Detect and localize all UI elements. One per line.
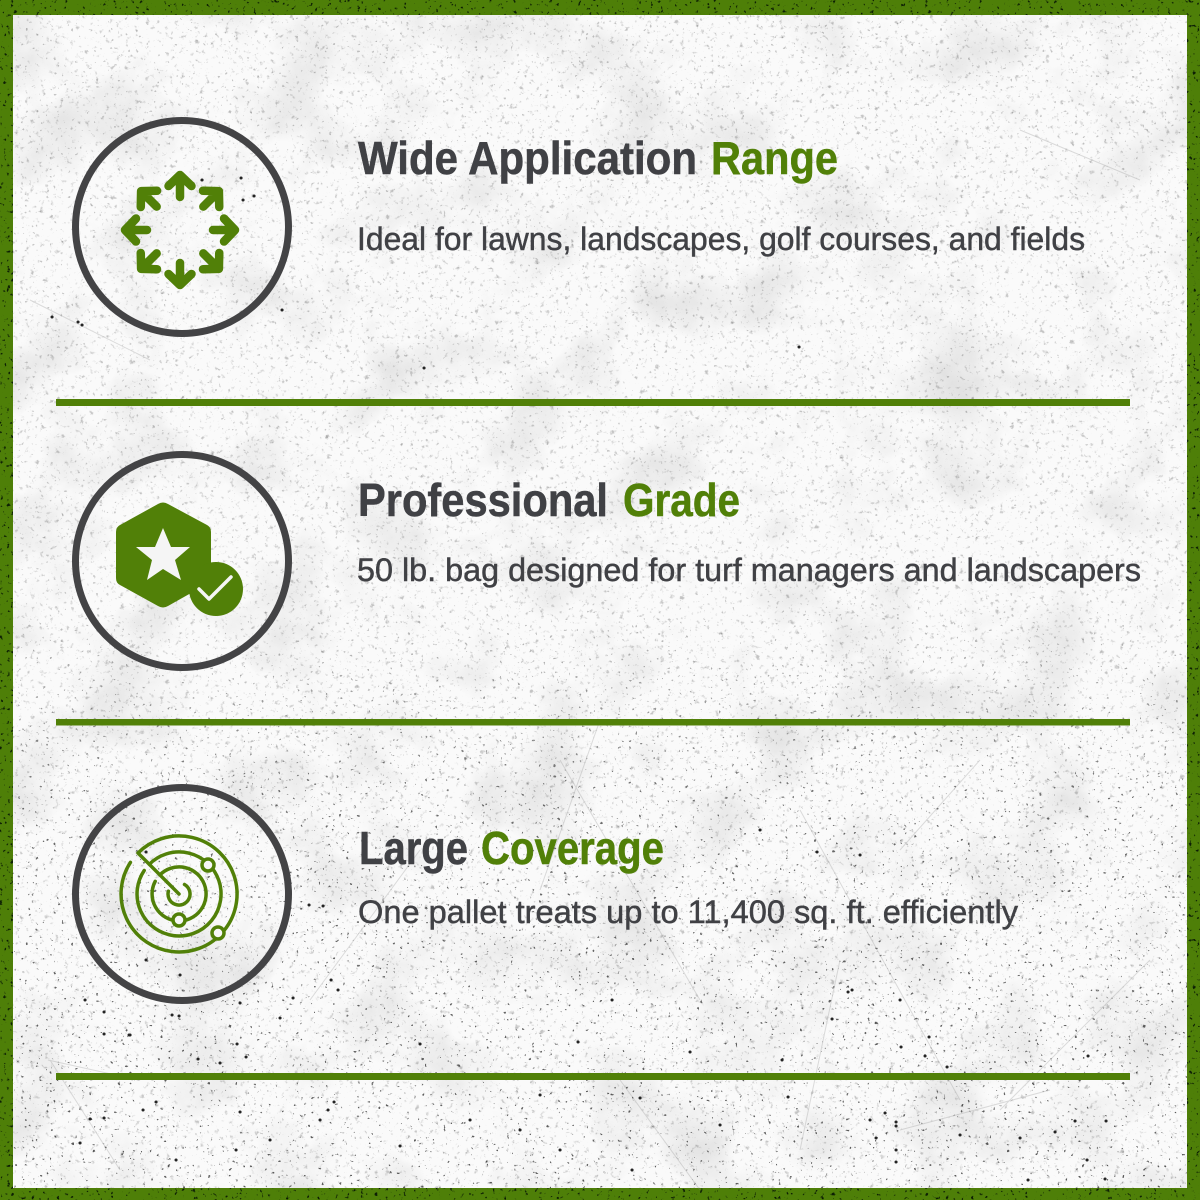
heading: wide application range: Wide Application (358, 132, 697, 184)
heading: wide application range: Range (711, 132, 838, 184)
heading: professional grade: Professional (358, 474, 608, 526)
text: bag description: 50 lb. bag designed for turf managers and landscapers (357, 552, 1141, 588)
section: large coverage (76, 788, 1018, 1000)
icon: expanding arrows in circle (76, 120, 288, 334)
icon: hexagon star badge in circle (76, 454, 288, 668)
section: professional grade (76, 454, 1141, 668)
divider 3 (56, 1073, 1130, 1080)
icon: radar in circle (76, 788, 288, 1000)
divider 2 (56, 719, 1130, 726)
divider 1 (56, 399, 1130, 406)
section: wide application range (76, 120, 1085, 334)
heading: professional grade: Grade (623, 474, 740, 526)
heading: large coverage (359, 822, 664, 874)
heading: large coverage: Coverage (481, 822, 664, 874)
text: lawns description: Ideal for lawns, landscapes, golf courses, and fields (357, 221, 1085, 257)
heading: large coverage: Large (359, 822, 468, 874)
text: pallet description: One pallet treats up to 11,400 sq. ft. efficiently (358, 894, 1018, 930)
